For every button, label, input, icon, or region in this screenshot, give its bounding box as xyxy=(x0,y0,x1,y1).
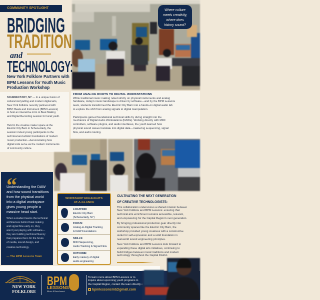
outcome text xyxy=(73,252,100,263)
section text one: to explore the shift from analog signals to digital manipulation. xyxy=(73,108,148,111)
quote body: and signal flow early on, they xyxy=(6,225,40,228)
workshop heading: AT-A-GLANCE xyxy=(74,200,94,204)
intro paragraph two: Electric City Barn in Schenectady, the xyxy=(7,127,51,130)
next generation text one xyxy=(117,206,187,220)
logo: new york folklore xyxy=(5,276,36,294)
next generation text one: This collaboration underscores a shared mission between xyxy=(117,206,187,208)
intro paragraph two: music production—demonstrating how xyxy=(7,139,52,142)
subtitle xyxy=(7,74,70,90)
quote text xyxy=(6,184,49,214)
next generation text two xyxy=(117,222,184,241)
next generation text two: community spaces like the Electric City Barn, the xyxy=(117,226,176,229)
divider right xyxy=(84,275,87,295)
intro paragraph two xyxy=(7,124,60,150)
location text: LOCATION: xyxy=(73,208,87,210)
quote text: massive head start. xyxy=(6,210,38,214)
contact text: To learn more about BPM Lessons or to xyxy=(88,276,135,278)
next generation text two: real-world sound engineering principles. xyxy=(117,238,166,241)
location text: Electric City Barn xyxy=(73,212,93,214)
next generation heading xyxy=(117,194,176,204)
next generation text three: New York Folklore and BPM Lessons look forward to xyxy=(117,243,181,246)
logo text: FOLKLORE xyxy=(12,289,36,294)
section text one: While traditional music making relied strictly on physical instruments and analog xyxy=(73,96,170,100)
section text two: physical sound waves translate into digital data—mastering sequencing, signal xyxy=(73,127,169,130)
focus text: FOCUS: xyxy=(73,222,83,225)
item: location xyxy=(61,208,95,218)
title xyxy=(7,15,73,75)
location text: (Schenectady, NY) xyxy=(73,216,95,218)
icon: outcome xyxy=(60,253,69,262)
next generation text two: By bringing professional production gear directly into xyxy=(117,222,181,225)
banner label: COMMUNITY SPOTLIGHT xyxy=(7,6,49,10)
divider left xyxy=(40,275,42,295)
section text two: mechanics of Digital Audio Workstations (DAWs). Working directly with MIDI xyxy=(73,119,165,122)
intro paragraph one xyxy=(7,96,60,118)
item: skills xyxy=(58,234,110,250)
quote text: Understanding the DAW xyxy=(6,184,46,188)
intro paragraph one: to host an interactive intro to Beat Making xyxy=(7,111,56,114)
callout: handwritten question: Where culture xyxy=(164,8,186,12)
next generation text one: technical arts enrichment remains accessible, relevant, xyxy=(117,213,184,216)
next generation text one: and empowering for the Capital Region's next generation. xyxy=(117,217,187,220)
quote body: creative technology. xyxy=(6,246,29,249)
logo: bpm lessons xyxy=(47,274,79,293)
panel: intro text xyxy=(0,92,69,152)
icon: skills xyxy=(60,238,69,246)
section: next generation xyxy=(117,194,187,263)
section text two: controllers, software plugins, and audio interfaces, the youth learned how xyxy=(73,123,162,126)
intro paragraph one: cultural storytelling and modern digital arts, xyxy=(7,100,57,103)
white band above footer xyxy=(0,266,160,271)
icon: bridge xyxy=(5,276,36,284)
section text one: hardware, today's music landscape is driven by software—and by the BPM Lessons xyxy=(73,100,175,103)
quote text: and how sound transitions xyxy=(6,190,49,194)
logo text xyxy=(12,284,36,294)
top photo: music production room xyxy=(71,0,201,90)
quote text: from the physical world xyxy=(6,195,44,199)
next generation text two: outlet for self-expression and a solid foundation in xyxy=(117,234,178,237)
icon: microphone xyxy=(69,274,79,291)
gold rule xyxy=(117,262,154,263)
contact text: the Capital Region, contact the team directly at xyxy=(88,283,144,286)
next generation text one: New York Folklore and BPM Lessons: ensuring that xyxy=(117,209,180,212)
intro paragraph one: SCHENECTADY, NY — In a unique fusion of xyxy=(7,96,60,99)
section text two: Participants gained foundational technical skills by diving straight into the xyxy=(73,116,162,118)
section text two: flow, and audio routing. xyxy=(73,131,101,134)
next generation text three: technology throughout the Capital District. xyxy=(117,254,168,257)
workshop heading xyxy=(58,194,110,206)
skills text xyxy=(73,236,107,248)
section heading: FROM ANALOG ROOTS TO DIGITAL WORKSTATIONS xyxy=(73,92,152,96)
quote attribution: — The BPM Lessons Team xyxy=(6,254,42,258)
item: outcome xyxy=(58,250,110,264)
gold rule xyxy=(27,53,51,56)
skills text: SKILLS: xyxy=(73,236,83,240)
lessons wordmark: LESSONS xyxy=(47,284,69,290)
panel: from analog roots xyxy=(71,91,200,139)
next generation text three: expanding these digital arts initiatives, continuing to xyxy=(117,247,180,250)
quote body: When a student learns the technical xyxy=(6,216,48,220)
subtitle: New York Folklore Partners with xyxy=(7,74,69,79)
intro paragraph one: New York Folklore recently partnered with xyxy=(7,104,56,107)
next generation heading: CULTIVATING THE NEXT GENERATION xyxy=(117,194,176,198)
contact text: inquire about upcoming youth programs in xyxy=(88,279,138,282)
panel: workshop highlights xyxy=(57,193,110,265)
contact text xyxy=(88,276,144,286)
item: focus xyxy=(58,219,110,234)
quote body: that prepares them for the future xyxy=(6,237,44,240)
workshop heading: WORKSHOP HIGHLIGHTS xyxy=(65,196,103,200)
panel: quote xyxy=(1,172,52,265)
quote body: they are building technical fluency xyxy=(6,233,45,236)
contact email: bpmlessonsmt@gmail.com xyxy=(92,288,136,292)
quote text: gives young people a xyxy=(6,205,41,209)
photo: student at keyboard xyxy=(142,257,201,300)
footer xyxy=(0,271,200,300)
intro paragraph two: session invited young participants to the xyxy=(7,131,54,134)
intro paragraph two: technical and artistic foundations of modern xyxy=(7,135,58,138)
intro paragraph two: of community culture. xyxy=(7,147,32,150)
section text two xyxy=(73,116,169,134)
quote body: architecture behind beat making xyxy=(6,221,43,224)
title line: and: and xyxy=(10,51,23,60)
callout: handwritten question: meets creativity, xyxy=(163,12,187,16)
skills text: MIDI Sequencing, xyxy=(73,240,94,244)
quote text: into a digital workspace xyxy=(6,200,44,204)
callout: handwritten question: where does xyxy=(166,18,184,22)
focus text: Analog-to-Digital Tracking xyxy=(73,226,103,229)
photo: students at workstations xyxy=(54,138,201,192)
outcome text: OUTCOME: xyxy=(73,252,87,255)
section text one: team, students transformed the Electric City Barn into a hands-on digital audio lab xyxy=(73,104,173,107)
intro paragraph one: and Digital Recording session for local youth. xyxy=(7,115,60,118)
quote body xyxy=(6,216,48,249)
subtitle: Production Workshop xyxy=(7,85,50,90)
icon: focus xyxy=(60,223,69,232)
outcome text: audio engineering xyxy=(73,260,94,263)
next generation text three: build bridges between music traditions and modern xyxy=(117,250,179,254)
next generation heading: OF CREATIVE TECHNOLOGISTS: xyxy=(117,200,168,204)
outcome text: Early mastery of digital xyxy=(73,256,99,259)
intro paragraph two: Held in the creative maker space at the xyxy=(7,124,53,126)
bpm tagline: Music & Enrichment xyxy=(47,291,65,293)
banner: community spotlight xyxy=(0,4,62,12)
focus text: & DAW Foundations xyxy=(73,230,96,233)
callout: handwritten question: history sound? xyxy=(164,22,186,26)
location text xyxy=(73,208,95,218)
focus text xyxy=(73,222,103,233)
intro paragraph one: BPM: Beats and Instrument (BPM Lessons) xyxy=(7,108,58,111)
quote body: of media, sound design, and xyxy=(6,241,39,244)
callout: handwritten question xyxy=(158,5,192,29)
section text one xyxy=(73,96,175,111)
next generation text three xyxy=(117,243,181,257)
quote body: aren't just playing with software— xyxy=(6,229,45,232)
icon: quotation mark: “ xyxy=(6,172,17,196)
skills text: Audio Tracking & Signal Flow xyxy=(73,244,107,248)
logo text: NEW YORK xyxy=(12,284,36,288)
icon: location xyxy=(61,208,68,218)
next generation text two: workshop provided young creatives with a constructive xyxy=(117,230,184,233)
intro paragraph two: digital tools serve as the modern instruments xyxy=(7,143,59,146)
subtitle: BPM Lessons for Youth Music xyxy=(7,80,66,85)
